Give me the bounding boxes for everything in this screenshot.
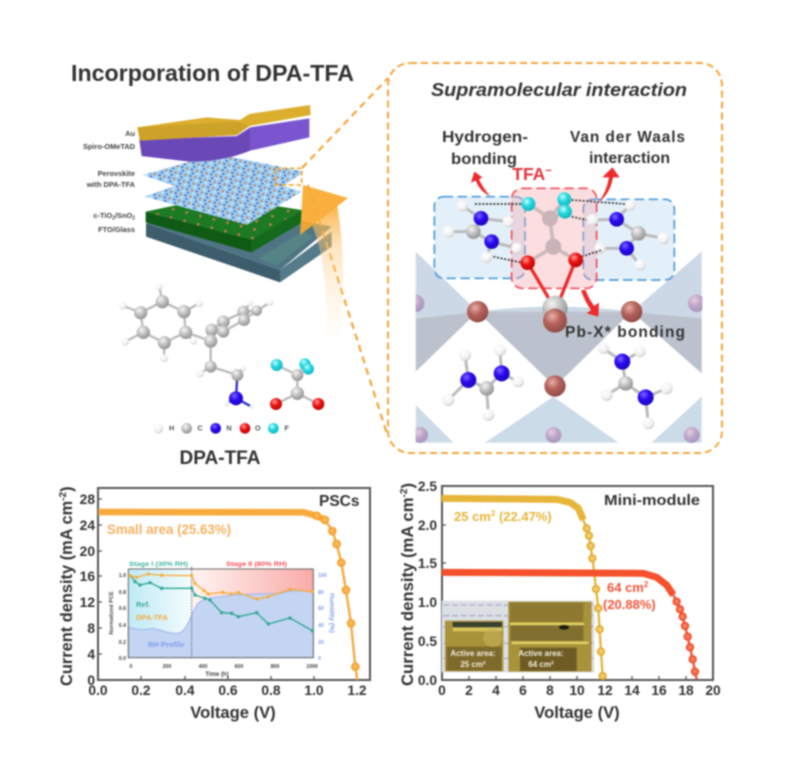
formamidinium left [442, 200, 522, 263]
inset text: 0.6 [119, 606, 126, 612]
25 cm2 curve [442, 498, 606, 679]
x axis tick labels: 0.6 [218, 683, 238, 698]
chart tag: Mini-module [604, 492, 700, 509]
inset text: 60 [318, 606, 324, 612]
y axis tick labels: 1.5 [418, 556, 437, 571]
inset text: Time (h) [205, 672, 229, 678]
inset text: 600 [235, 664, 243, 670]
x axis tick labels: 4 [492, 683, 500, 698]
chart tag: PSCs [319, 493, 360, 510]
inset text: RH Profile [148, 640, 184, 649]
module 25 cm2 [445, 621, 503, 671]
y axis tick labels: 1.0 [418, 595, 437, 610]
red dashed box [512, 188, 597, 288]
inset text: 0 [130, 664, 133, 670]
inset text: 20 [318, 640, 324, 646]
label: van der Waals: interaction [589, 150, 670, 167]
inset: stability chart [128, 567, 314, 658]
y axis title: Current density (mA cm [398, 497, 417, 686]
J-V curves [442, 498, 698, 679]
x axis tick labels: 2 [465, 683, 473, 698]
plot frame [442, 486, 713, 680]
inset text: 0.8 [119, 590, 126, 596]
panel frame [388, 63, 722, 453]
DPA-TFA series [128, 572, 314, 601]
molecule: DPA-TFA [119, 283, 324, 434]
arrow: orange curved [300, 185, 348, 348]
formamidinium lower left [442, 344, 524, 421]
series label: Small area (25.63%) [107, 522, 231, 537]
RH profile area [128, 591, 313, 658]
formamidinium lower right [598, 343, 673, 429]
series label: 25 cm2: (22.47%) [495, 509, 552, 524]
x axis title: Voltage (V) [190, 703, 276, 722]
stage I background [128, 569, 192, 658]
x axis tick labels: 10 [569, 683, 585, 698]
series label: 25 cm2: 2 [491, 509, 496, 518]
x axis tick labels: 0.0 [88, 683, 108, 698]
inset text: 100 [318, 573, 327, 579]
y axis tick labels: 12 [80, 595, 95, 610]
lattice atoms [407, 295, 705, 443]
y axis tick labels: 0.0 [418, 673, 437, 688]
TFA anion [520, 192, 583, 333]
atom legend: H [169, 424, 174, 433]
inset text [109, 562, 335, 678]
inset text: 0.0 [119, 656, 126, 662]
stack labels: Au [125, 129, 135, 138]
x axis tick labels: 1.2 [347, 683, 367, 698]
y axis title: ) [398, 483, 417, 489]
y axis tick labels: 4 [87, 647, 95, 662]
crystal lattice illustration [407, 167, 705, 443]
x axis tick labels: 16 [651, 683, 667, 698]
highlight rectangle [275, 168, 302, 185]
Ref series [130, 575, 314, 632]
label: van der Waals: Van der Waals [570, 129, 685, 146]
x axis tick labels [88, 683, 367, 698]
photo inset: modules [442, 601, 594, 672]
bonds [123, 287, 318, 407]
formamidinium right [586, 199, 669, 271]
stack labels: with DPA-TFA [86, 180, 136, 189]
photo inset labels [450, 649, 564, 669]
stack labels: /SnO [115, 211, 132, 220]
photo inset labels: Active area: [450, 649, 496, 658]
x axis tick labels: 0.2 [131, 683, 151, 698]
x axis tick labels: 0 [438, 683, 446, 698]
series label: 64 cm2: (20.88%) [603, 597, 656, 612]
layer: Spiro-OMeTAD [139, 118, 309, 162]
inset text: 40 [318, 623, 324, 629]
y axis tick labels [418, 479, 437, 688]
x axis tick labels [438, 683, 721, 698]
atom legend: N [226, 424, 232, 433]
chart: Mini-module J-V [398, 479, 721, 722]
y axis tick labels: 28 [80, 492, 95, 507]
x axis tick labels: 20 [705, 683, 721, 698]
inset text: Stage I (30% RH) [129, 562, 188, 568]
stage II background [192, 569, 313, 658]
inset text: DPA-TFA [136, 613, 169, 622]
y axis tick labels [80, 492, 95, 688]
64 cm2 curve [442, 572, 698, 679]
atom legend: O [255, 424, 261, 433]
layer: Au [137, 105, 311, 141]
y axis title: -2 [58, 491, 69, 501]
y axis tick labels: 20 [80, 544, 95, 559]
y axis tick labels: 2.5 [418, 479, 437, 494]
molecule label: DPA-TFA [180, 448, 261, 469]
stack labels: c-TiO [93, 211, 112, 220]
stack labels [83, 129, 136, 234]
atom legend [153, 423, 289, 434]
inset text: 400 [199, 664, 207, 670]
inset text: Humidity (%) [328, 593, 335, 633]
stack labels: Spiro-OMeTAD [83, 142, 136, 151]
x axis title: Voltage (V) [534, 703, 620, 722]
label: Pb-X bonding: Pb-X* bonding [565, 324, 685, 341]
x axis tick labels: 14 [624, 683, 640, 698]
device layer stack [137, 105, 332, 282]
chart: PSCs J-V [58, 486, 370, 722]
photo inset labels: 25 cm² [460, 660, 486, 669]
y axis title: -2 [399, 488, 410, 497]
x axis tick labels: 1.0 [304, 683, 324, 698]
inset text: 1.0 [119, 573, 126, 579]
arrow: van der Waals [598, 167, 620, 203]
arrow: Pb-X bonding [581, 290, 599, 317]
inset text: 200 [163, 664, 171, 670]
inset text: Stage II (80% RH) [226, 562, 287, 568]
x axis tick labels: 6 [519, 683, 527, 698]
y axis tick labels: 0 [87, 673, 95, 688]
label: hydrogen bonding: Hydrogen- [442, 129, 528, 146]
stack labels: FTO/Glass [98, 225, 135, 234]
x axis tick labels: 8 [546, 683, 554, 698]
photo inset labels: Active area: [518, 649, 564, 658]
inset text: 0.4 [119, 623, 126, 629]
series label: 64 cm2: 2 [644, 580, 649, 589]
y axis tick labels: 8 [87, 621, 95, 636]
stack labels: Perovskite [98, 169, 135, 178]
octahedra [416, 252, 702, 443]
inset text: 1000 [306, 664, 318, 670]
inset text: Ref. [136, 600, 150, 609]
layer: perovskite lower [145, 168, 302, 225]
x axis tick labels: 12 [597, 683, 613, 698]
y axis tick labels: 24 [80, 518, 95, 533]
atoms [119, 283, 324, 410]
stage divider [190, 567, 193, 658]
series label: 25 cm2: 25 cm [454, 509, 491, 524]
J-V curve small area [98, 512, 359, 680]
series label: 64 cm2: 64 cm [607, 580, 644, 595]
inset text: 800 [271, 664, 279, 670]
layer: perovskite upper [143, 154, 304, 211]
zoom connector lines [302, 78, 388, 437]
x axis tick labels: 18 [678, 683, 694, 698]
inset frame [128, 569, 313, 658]
panel: supramolecular interaction [388, 63, 722, 453]
arrow: hydrogen bonding [471, 172, 490, 196]
x axis tick labels: 0.8 [261, 683, 281, 698]
inset text: Normalized PCE [109, 591, 115, 635]
y axis title: ) [58, 486, 76, 492]
layer: c-TiO2/SnO2 [146, 197, 302, 252]
atom legend: F [284, 424, 289, 433]
atom legend: C [197, 424, 203, 433]
blue dashed boxes [434, 197, 674, 280]
y axis title: Current density (mA cm [58, 501, 76, 686]
y axis tick labels: 16 [80, 569, 95, 584]
stack labels: 2 [112, 216, 115, 222]
module 64 cm2 [508, 602, 592, 672]
panel heading: Supramolecular interaction [431, 80, 687, 100]
y axis tick labels: 2.0 [418, 518, 437, 533]
label: hydrogen bonding: bonding [451, 151, 517, 168]
layer: FTO/Glass [146, 205, 332, 282]
axis ticks [442, 486, 686, 680]
y axis tick labels: 0.5 [418, 634, 437, 649]
label: TFA: − [545, 165, 552, 177]
inset text: 0.2 [119, 640, 126, 646]
inset text: 0 [318, 656, 321, 662]
axis ticks [98, 499, 357, 680]
plot frame [98, 488, 370, 680]
title: Incorporation of DPA-TFA [71, 60, 354, 86]
inset text: 80 [318, 590, 324, 596]
hydrogen bond dots [475, 200, 625, 263]
photo inset labels: 64 cm² [528, 660, 554, 669]
stack labels: 2 [132, 216, 135, 222]
label: TFA: TFA [512, 164, 545, 184]
x axis tick labels: 0.4 [175, 683, 195, 698]
